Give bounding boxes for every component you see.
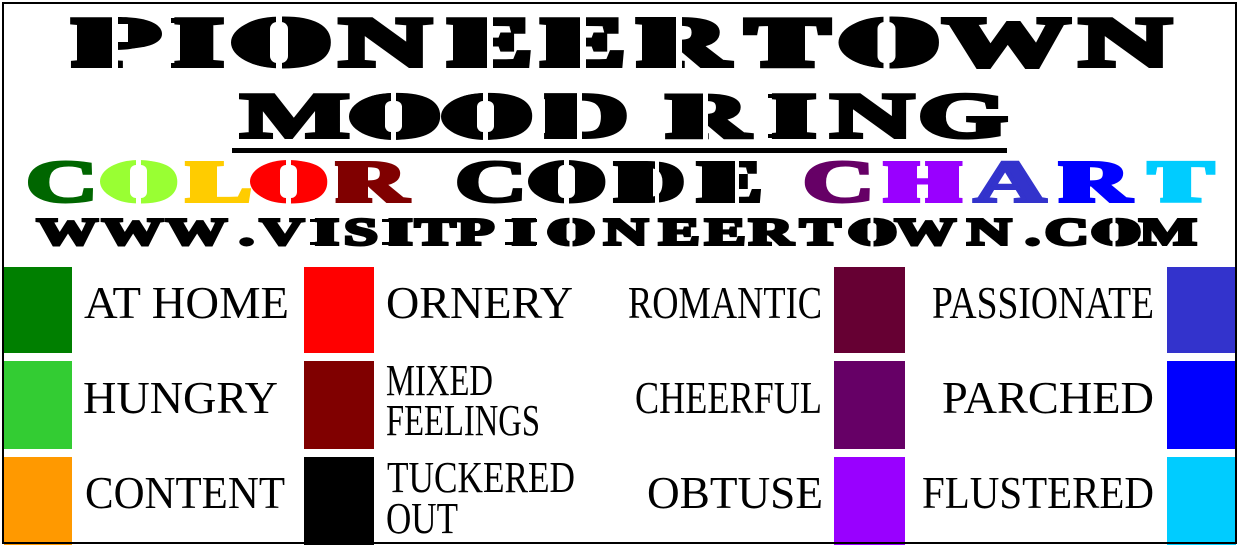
legend column 2 (304, 267, 575, 545)
label: romantic: ROMANTIC (628, 277, 822, 328)
label: mixed feelings: FEELINGS (386, 396, 540, 445)
stencil shaping for the heading letters (77, 15, 1190, 248)
swatch: tuckered out (304, 457, 374, 545)
swatch: cheerful (834, 361, 905, 449)
legend column 4 (922, 267, 1236, 545)
swatch: romantic (834, 267, 905, 353)
swatch: flustered (1167, 457, 1236, 545)
label: tuckered out: OUT (386, 494, 458, 543)
swatch: obtuse (834, 457, 905, 545)
label: ornery: ORNERY (386, 277, 573, 328)
swatch: hungry (4, 361, 72, 449)
title: Mood Ring: MOOD RING (241, 81, 1008, 151)
label: obtuse: OBTUSE (647, 467, 823, 518)
label: content: CONTENT (85, 467, 285, 518)
title underline (232, 148, 1007, 153)
label: at home: AT HOME (84, 277, 289, 328)
legend column 1 (4, 267, 289, 545)
label: mixed feelings (386, 356, 540, 445)
label: cheerful: CHEERFUL (635, 372, 822, 423)
subtitle: Color Code Chart: COLOR CODE CHAR T (26, 149, 1214, 214)
swatch: at home (4, 267, 72, 353)
label: hungry: HUNGRY (83, 372, 278, 423)
label: passionate: PASSIONATE (932, 277, 1154, 328)
swatch: mixed feelings (304, 361, 374, 449)
header block (26, 4, 1214, 253)
label: parched: PARCHED (942, 372, 1154, 423)
label: tuckered out: TUCKERED (387, 453, 575, 502)
swatch: ornery (304, 267, 374, 353)
swatch: parched (1167, 361, 1236, 449)
swatch: content (4, 457, 72, 545)
label: flustered: FLUSTERED (922, 467, 1154, 518)
swatch: passionate (1167, 267, 1236, 353)
title: Pioneertown: PIONEERTOWN (73, 4, 1171, 81)
website address: WWW.VISITPIONEERTOWN.COM (37, 211, 1197, 253)
label: mixed feelings: MIXED (386, 356, 493, 405)
legend column 3 (628, 267, 905, 545)
label: tuckered out (386, 453, 575, 543)
